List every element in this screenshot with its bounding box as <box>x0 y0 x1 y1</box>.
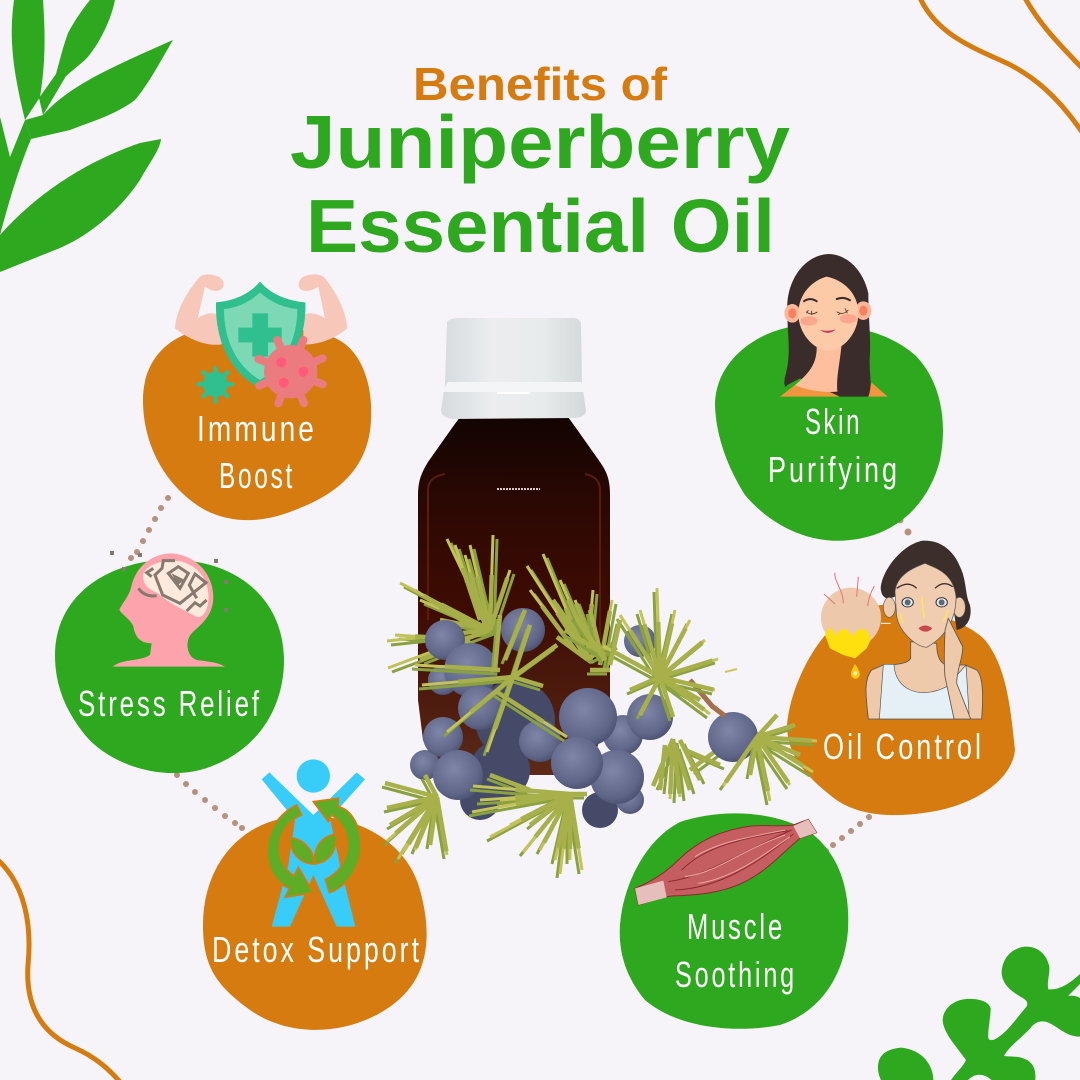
connector dots: stress to detox <box>174 772 245 831</box>
label: Immune Boost: Boost <box>219 455 295 496</box>
blob <box>620 813 848 1029</box>
label: Skin Purifying <box>768 401 900 490</box>
stray needle <box>725 669 737 672</box>
title <box>290 58 790 268</box>
panel: immune boost <box>143 274 371 520</box>
decoration: curved lines top right <box>920 0 1080 132</box>
label: Detox Support: Detox Support <box>212 929 422 970</box>
juniper berries <box>410 608 758 828</box>
title line: Juniperberry: Juniperberry <box>290 100 790 184</box>
label: Muscle Soothing: Soothing <box>675 954 797 995</box>
panel: skin purifying <box>715 254 943 541</box>
decoration: leaves top left <box>0 0 173 272</box>
blob <box>787 605 1015 815</box>
decoration: plant bottom right <box>878 947 1080 1080</box>
icon: figure with recycling arrows <box>262 759 365 927</box>
decoration: curved line bottom left <box>0 860 120 1080</box>
label: Skin Purifying: Purifying <box>768 449 900 490</box>
bottle cap <box>441 318 586 419</box>
icon: woman with closed eyes <box>780 254 888 397</box>
icon: head with tangled brain <box>113 553 225 667</box>
panel: muscle soothing <box>620 813 848 1029</box>
label: Skin Purifying: Skin <box>805 401 862 442</box>
label: Muscle Soothing <box>675 906 797 995</box>
bottle body <box>418 417 610 775</box>
connector dots: skin to oil <box>896 516 912 536</box>
icon: muscle <box>635 819 817 905</box>
branch stem <box>690 680 725 716</box>
panel: detox support <box>203 759 427 1030</box>
juniper needles front layer <box>382 588 817 878</box>
juniper needles back layer <box>387 535 724 803</box>
label: Immune Boost: Immune <box>197 408 317 449</box>
icon: arms, shield, virus <box>175 274 347 403</box>
label: Immune Boost <box>197 408 317 496</box>
connector dots: immune to stress <box>128 495 171 561</box>
blob <box>143 327 371 520</box>
icon: woman with oily skin <box>821 541 983 719</box>
panel: oil control <box>787 541 1015 815</box>
blob <box>203 816 427 1030</box>
small squares near head <box>110 551 228 612</box>
label: Oil Control: Oil Control <box>823 726 984 767</box>
label: Muscle Soothing: Muscle <box>687 906 785 947</box>
title line: Essential Oil: Essential Oil <box>306 184 775 268</box>
blob <box>715 325 943 541</box>
panel: stress relief <box>55 551 284 773</box>
title line: Benefits of: Benefits of <box>413 58 668 110</box>
connector dots: oil to muscle <box>823 814 872 854</box>
central image: bottle and juniper branch <box>382 318 817 878</box>
blob <box>55 560 284 773</box>
label: Stress Relief: Stress Relief <box>78 683 262 724</box>
